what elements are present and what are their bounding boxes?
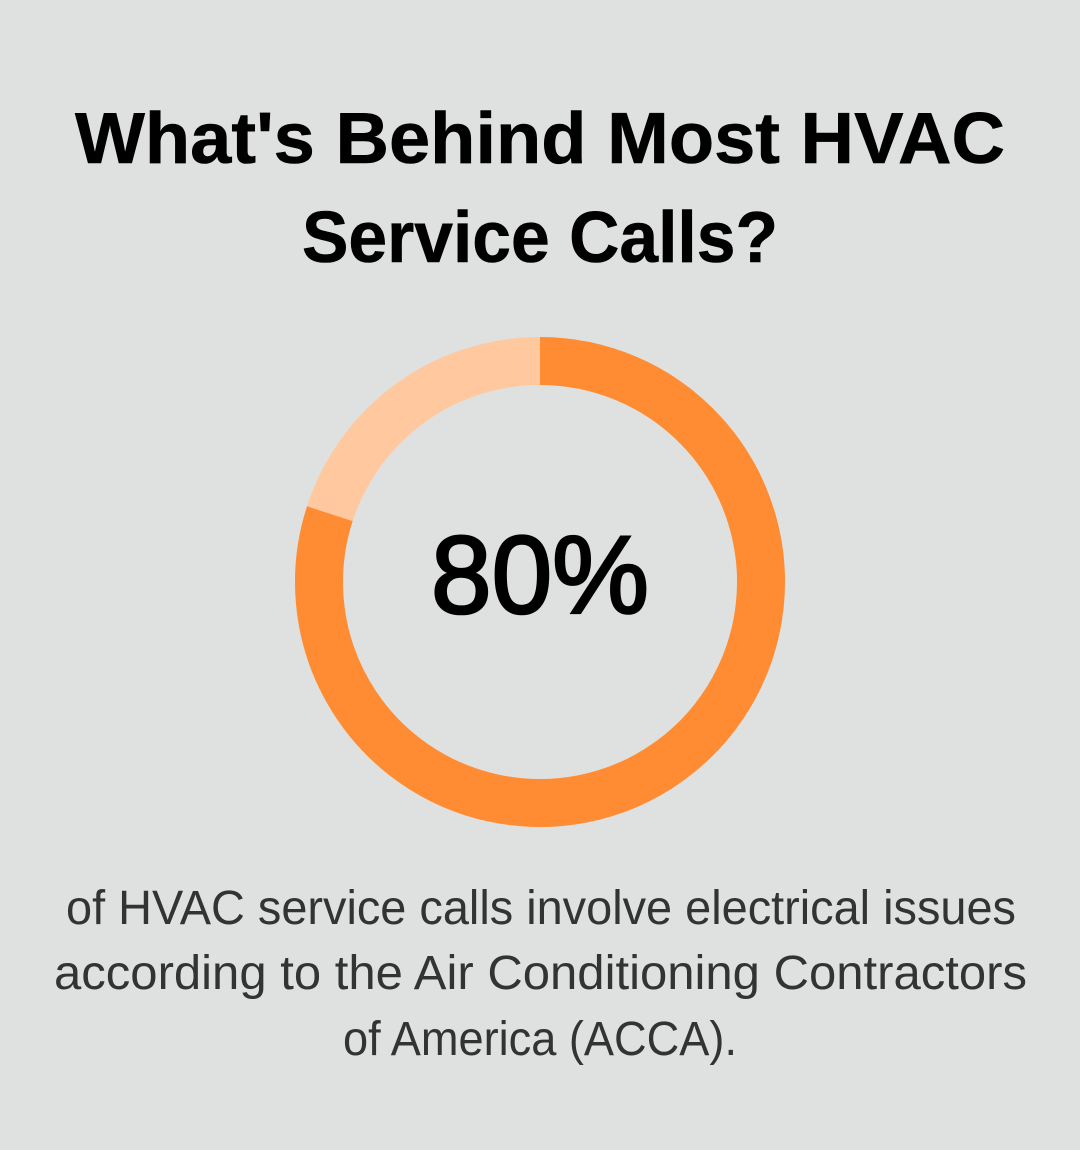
title [75, 99, 1005, 278]
description text [54, 882, 1027, 1066]
donut segment: 80% [319, 361, 761, 803]
title: Service Calls? [302, 198, 778, 278]
donut center value: 80% [431, 514, 649, 637]
description text: according to the Air Conditioning Contractors [54, 947, 1027, 1000]
donut segment: remaining 20% [330, 361, 540, 514]
description text: of HVAC service calls involve electrical issues [66, 882, 1016, 935]
donut chart: 80% [319, 361, 761, 803]
description text: of America (ACCA). [343, 1013, 737, 1066]
title: What's Behind Most HVAC [75, 99, 1005, 179]
